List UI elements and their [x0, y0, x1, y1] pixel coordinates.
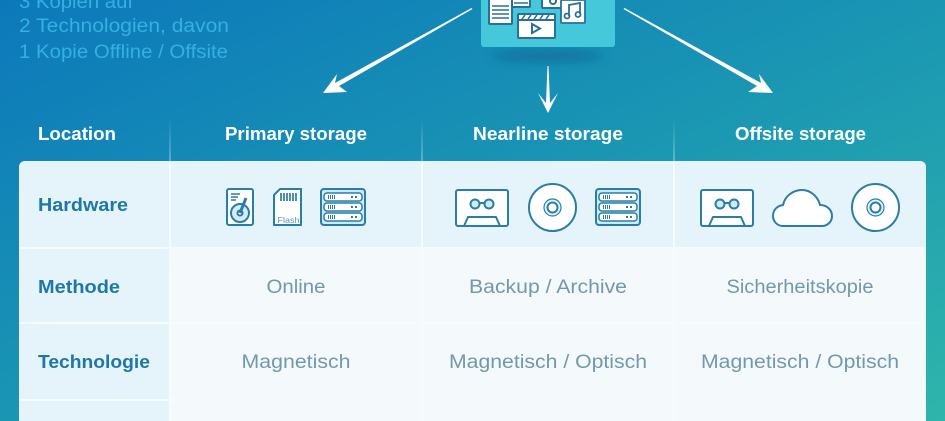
row: methode: [19, 249, 926, 322]
row: hardware: [19, 161, 926, 247]
row labels: Hardware: [38, 195, 128, 215]
row: cut-off last row: [19, 401, 926, 421]
arrow: right: [624, 8, 773, 93]
table values: Sicherheitskopie: [726, 277, 874, 298]
icon: document: [489, 0, 512, 24]
icon: second document: [512, 0, 530, 7]
table header: Location: [38, 124, 116, 144]
table values: Magnetisch: [242, 352, 350, 373]
icon: optical disc: [852, 184, 899, 231]
data icon box: [481, 0, 615, 61]
row labels: Technologie: [38, 352, 150, 372]
icon: music note: [561, 0, 585, 23]
table values: Magnetisch / Optisch: [449, 352, 647, 373]
icon: image card: [542, 0, 566, 8]
arrow: left: [323, 8, 472, 93]
table values: Magnetisch / Optisch: [701, 352, 899, 373]
table values: Backup / Archive: [469, 277, 627, 298]
table values: Online: [266, 277, 326, 298]
table header: Nearline storage: [473, 124, 623, 144]
icon: optical disc: [529, 184, 576, 231]
row labels: Methode: [38, 277, 120, 297]
column dividers in header: [170, 118, 674, 161]
icon: cassette: [456, 190, 508, 226]
icon: cloud: [773, 190, 832, 226]
text block: 3-2-1 rule: [19, 0, 229, 63]
table header: [38, 124, 866, 144]
icon: hard disk: [227, 189, 253, 225]
arrow: down: [538, 66, 558, 113]
table panel: [19, 161, 926, 421]
icon: server rack: [596, 189, 640, 225]
text block: 3-2-1 rule: 1 Kopie Offline / Offsite: [19, 42, 228, 63]
icon: server rack: [321, 189, 365, 225]
icon: flash card: [274, 189, 301, 225]
row: technologie: [19, 324, 926, 399]
table values: [242, 277, 899, 373]
icon: cassette: [701, 190, 753, 226]
icon: video clapper: [518, 14, 555, 38]
table header: Primary storage: [225, 124, 367, 144]
row labels: [38, 195, 150, 372]
text block: 3-2-1 rule: 2 Technologien, davon: [19, 16, 229, 37]
table header: Offsite storage: [735, 124, 866, 144]
icon: flash card: Flash: [278, 216, 300, 225]
